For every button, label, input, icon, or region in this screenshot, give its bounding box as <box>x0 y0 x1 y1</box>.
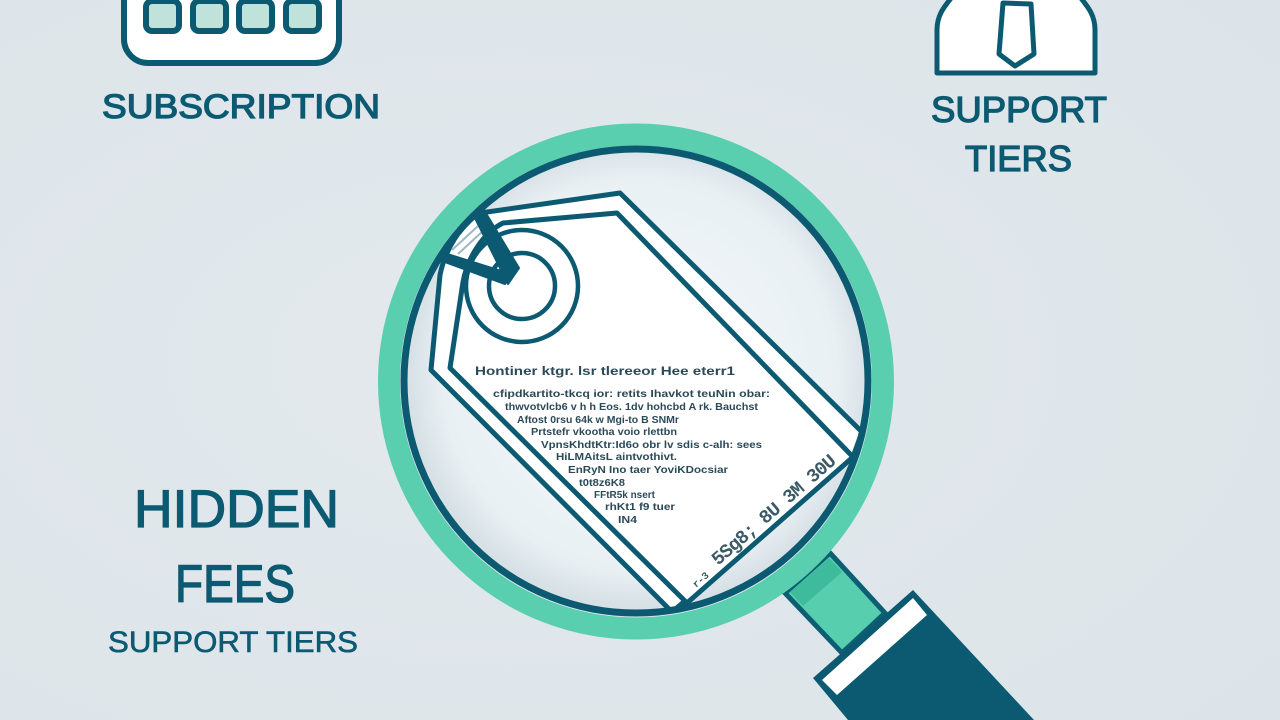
label: support tiers <box>931 89 1107 179</box>
magnifying glass dark rim <box>404 149 868 613</box>
title: hidden fees: HIDDEN <box>134 480 339 539</box>
label: subscription: SUBSCRIPTION <box>102 88 380 126</box>
magnifying glass lens interior <box>404 149 868 613</box>
fine print text: EnRyN Ino taer YoviKDocsiar <box>568 464 728 476</box>
fine print text: FFtR5k nsert <box>594 489 655 501</box>
tag string <box>441 210 519 284</box>
rotated tag serial number: r-3 <box>691 571 712 591</box>
fine print text: IN4 <box>618 514 637 526</box>
fine print text: Prtstefr vkootha voio rlettbn <box>531 426 677 438</box>
rotated tag serial number: 5Sg8; 8U 3M 30U <box>708 450 841 571</box>
icon: subscription card <box>124 0 339 63</box>
label: support tiers: SUPPORT <box>931 89 1107 130</box>
fine print text: Hontiner ktgr. lsr tlereeor Hee eterr1 <box>475 366 736 378</box>
infographic canvas <box>102 0 1107 720</box>
fine print text: VpnsKhdtKtr:Id6o obr lv sdis c-alh: sees <box>541 439 762 451</box>
price tag <box>431 193 862 612</box>
fine print text: cfipdkartito-tkcq ior: retits Ihavkot teuNin obar: <box>493 388 770 400</box>
magnifying glass handle <box>785 553 1034 720</box>
fine print text: rhKt1 f9 tuer <box>605 501 675 513</box>
label: support tiers subheading: SUPPORT TIERS <box>108 626 358 659</box>
fine print text: t0t8z6K8 <box>579 477 625 489</box>
title: hidden fees: FEES <box>175 555 295 614</box>
fine print text: thwvotvlcb6 v h h Eos. 1dv hohcbd A rk. Bauchst <box>505 401 759 413</box>
fine print text: Aftost 0rsu 64k w Mgi-to B SNMr <box>517 414 679 426</box>
fine print text <box>475 366 770 526</box>
title: hidden fees <box>134 480 339 614</box>
label: support tiers: TIERS <box>965 138 1072 179</box>
fine print text: HiLMAitsL aintvothivt. <box>556 451 677 463</box>
icon: support person with tie <box>937 0 1095 73</box>
magnifying glass lens ring <box>389 134 883 628</box>
